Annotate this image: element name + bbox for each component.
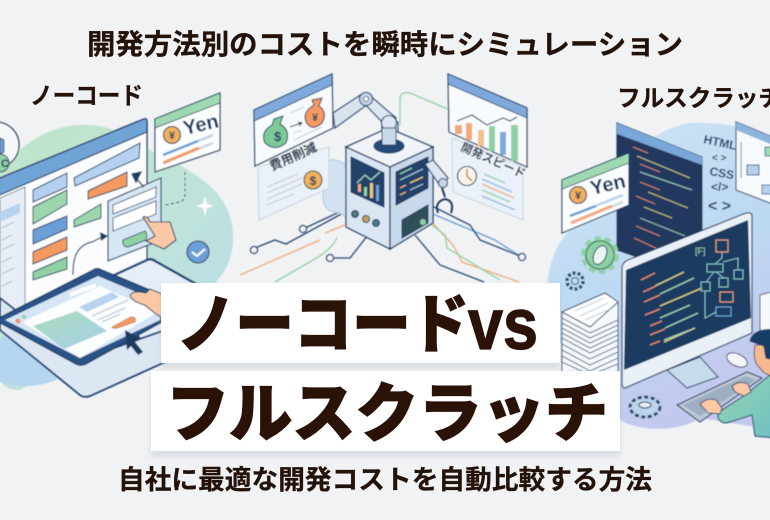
card: cost reduction: ¥ xyxy=(312,112,319,124)
monitor xyxy=(622,213,752,388)
dashed connector xyxy=(165,172,185,205)
title banner shadows xyxy=(151,286,620,456)
form card xyxy=(108,178,161,261)
panel: automation robot illustration xyxy=(240,74,528,282)
lower panel xyxy=(402,205,428,238)
panel: full-scratch illustration xyxy=(547,122,770,438)
programmer figure xyxy=(700,329,770,438)
circuit lines xyxy=(240,93,526,282)
monitor stand xyxy=(667,357,718,388)
HTML CSS code symbols: HTML xyxy=(702,132,738,153)
database badge: C xyxy=(1,158,9,170)
yen calculator card xyxy=(562,153,629,233)
panel: no-code illustration xyxy=(0,93,233,397)
keyboard xyxy=(677,372,762,422)
tablet hand xyxy=(130,289,162,318)
tablet base xyxy=(0,298,165,397)
blue shadow under tablet xyxy=(0,334,73,386)
card: cost reduction: $ xyxy=(274,129,282,144)
HTML CSS code symbols: CSS xyxy=(708,164,735,182)
card: cost reduction: $ xyxy=(310,174,317,188)
ports xyxy=(352,210,358,218)
banner: full scratch: フルスクラッチ xyxy=(166,378,608,450)
check badge xyxy=(187,241,209,263)
blue backdrop blob xyxy=(547,123,770,430)
paper stack xyxy=(562,293,618,375)
sparkle xyxy=(196,196,214,216)
tablet preview image xyxy=(33,311,107,349)
cursor arrow xyxy=(125,330,143,355)
gripper arm xyxy=(425,160,452,213)
HTML CSS code symbols xyxy=(702,132,738,215)
robot arm xyxy=(333,92,398,146)
heading: no-code: ノーコード xyxy=(30,83,143,110)
pointing hand xyxy=(143,217,176,249)
HTML CSS code symbols: </> xyxy=(711,180,728,194)
HTML CSS code symbols: < > xyxy=(712,153,727,164)
mouse xyxy=(724,350,750,370)
monitor flowchart xyxy=(695,240,743,318)
monitor flowchart: [F] xyxy=(695,246,706,256)
yen calculator card: ¥ xyxy=(169,130,176,142)
money bag yen xyxy=(305,98,324,127)
HTML CSS code symbols: < > xyxy=(708,198,731,215)
money bag dollar xyxy=(264,116,288,148)
robot body xyxy=(346,128,433,249)
banner: no-code vs: ノーコード xyxy=(177,289,469,361)
green backdrop blob xyxy=(0,125,233,390)
subtitle: 自社に最適な開発コストを自動比較する方法 xyxy=(118,465,653,495)
flow arrow xyxy=(73,236,104,275)
yen calculator card: Yen xyxy=(588,170,628,200)
database badge xyxy=(0,122,19,172)
code editor panel xyxy=(617,123,702,258)
yen calculator card: ¥ xyxy=(575,190,582,202)
yen calculator card: Yen xyxy=(181,110,221,140)
right screen code xyxy=(396,157,428,205)
bottom gear xyxy=(630,397,660,417)
yen calculator card xyxy=(155,93,221,172)
growth bars xyxy=(455,125,462,134)
heading: main title: 開発方法別のコストを瞬時にシミュレーション xyxy=(87,29,683,60)
label: development speed: 開発スピード xyxy=(459,140,528,181)
banner: no-code vs: vs xyxy=(468,285,538,365)
small gear xyxy=(567,273,583,289)
large green gear xyxy=(584,239,616,271)
front tablet xyxy=(0,268,162,365)
flowchart window xyxy=(736,122,770,205)
back tablet xyxy=(110,259,196,340)
cylinder behind robot xyxy=(323,160,347,216)
card: development speed xyxy=(448,74,528,220)
label: cost reduction: 費用削減 xyxy=(267,139,319,174)
card: cost reduction xyxy=(254,74,333,220)
main builder window xyxy=(0,119,176,330)
right paper stack xyxy=(760,291,770,335)
left screen chart xyxy=(351,157,384,207)
